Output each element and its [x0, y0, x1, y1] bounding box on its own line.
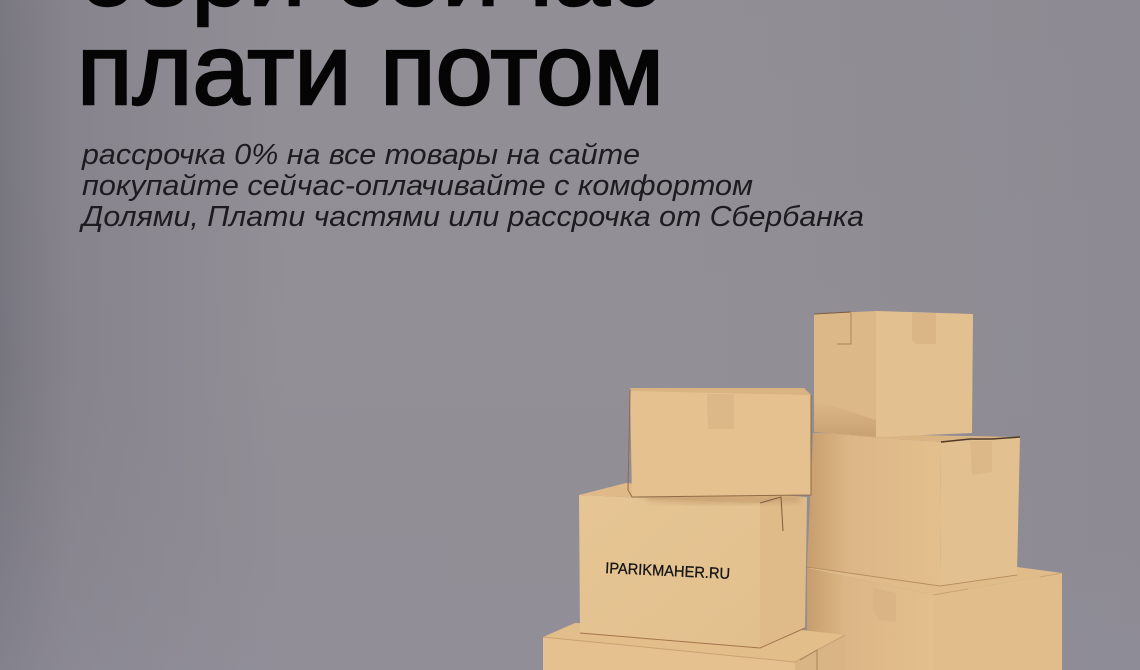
- box: bottom right: [807, 567, 1062, 670]
- box: centre with logo: [579, 483, 807, 648]
- subtitle text: Долями, Плати частями или рассрочка от Сбербанка: [79, 201, 864, 233]
- box: small top: [628, 388, 811, 497]
- title: плати потом: [77, 14, 664, 126]
- subtitle text: покупайте сейчас-оплачивайте с комфортом: [82, 170, 753, 202]
- box: bottom left: [543, 623, 845, 670]
- box stack: [543, 311, 1062, 670]
- subtitle text: [79, 139, 864, 233]
- subtitle text: рассрочка 0% на все товары на сайте: [81, 139, 640, 171]
- box label: IPARIKMAHER.RU: [605, 560, 730, 583]
- box: top right: [814, 311, 973, 437]
- box: middle right: [807, 433, 1020, 586]
